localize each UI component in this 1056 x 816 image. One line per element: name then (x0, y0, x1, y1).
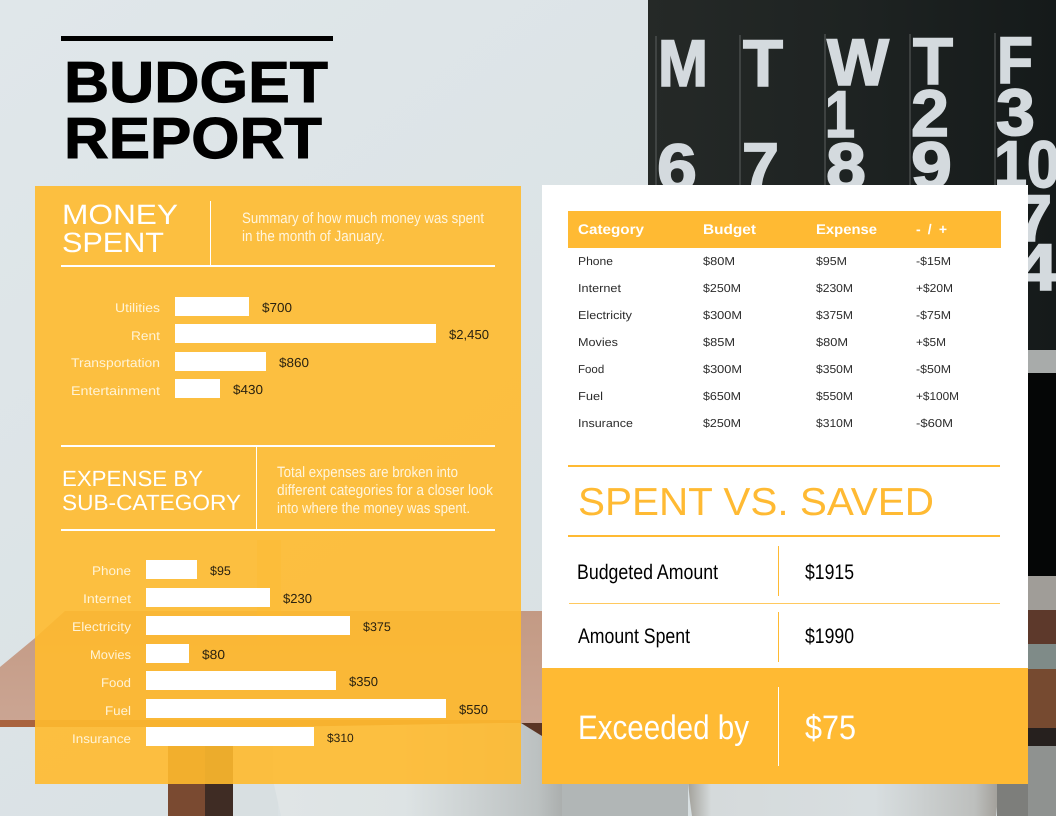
text: sub-category summary: different categories for a closer look (277, 482, 493, 499)
text: sub-category summary (277, 464, 493, 517)
table: budget by category: -$75M (916, 310, 951, 322)
heading: expense by sub-category: SUB-CATEGORY (62, 490, 241, 515)
background photo: wall calendar: T (743, 26, 783, 100)
table: budget by category: $300M (703, 364, 742, 376)
table: budget by category (568, 211, 1001, 430)
bar chart: expense by sub-category: $375 (363, 620, 391, 634)
bar chart: expense by sub-category: Electricity (72, 620, 132, 634)
bar chart: expense by sub-category: Internet (83, 592, 132, 606)
table: budget by category: $375M (816, 310, 853, 322)
background photo: table (0, 540, 700, 816)
row: amount spent: $1990 (805, 625, 854, 648)
table: budget by category: $650M (703, 391, 741, 403)
background photo: wall calendar: T (913, 24, 953, 98)
panel: money spent and expense by sub-category (35, 186, 521, 784)
bar chart: expense by sub-category: $350 (349, 674, 378, 689)
heading: money spent (62, 199, 178, 258)
table: budget by category: -$60M (916, 418, 953, 430)
table: budget by category: $250M (703, 283, 741, 295)
callout: exceeded by: Exceeded by (578, 709, 749, 747)
bar chart: expense by sub-category (72, 560, 488, 746)
table: budget by category: Budget (703, 221, 756, 237)
background photo: wall calendar: 3 (996, 75, 1035, 149)
background photo: wall calendar: 8 (826, 129, 866, 203)
heading: expense by sub-category: EXPENSE BY (62, 466, 203, 491)
text: money spent summary (242, 210, 485, 245)
background photo: bowls and lower wall (233, 610, 1056, 816)
table: budget by category: $80M (703, 256, 735, 268)
bar chart: money spent: Utilities (115, 301, 160, 315)
bar chart: money spent (71, 297, 489, 398)
table: budget by category: Phone (578, 256, 613, 268)
table: budget by category: +$5M (916, 337, 946, 349)
bar chart: expense by sub-category: Phone (92, 564, 131, 578)
background photo: wall calendar: F (997, 23, 1033, 97)
bar chart: money spent: Transportation (71, 356, 160, 370)
row: budgeted amount: Budgeted Amount (577, 561, 718, 584)
table: budget by category: Category (578, 221, 644, 237)
heading: expense by sub-category (62, 466, 241, 515)
bar chart: expense by sub-category: $230 (283, 591, 312, 606)
table: budget by category: Internet (578, 283, 622, 295)
text: sub-category summary: Total expenses are broken into (277, 464, 458, 481)
bar chart: expense by sub-category: Food (101, 676, 131, 690)
row: budgeted amount (577, 546, 854, 596)
text: money spent summary: Summary of how much money was spent (242, 210, 485, 227)
table: budget by category: $230M (816, 283, 853, 295)
background photo: wall calendar: M (658, 26, 708, 100)
table: budget by category: Insurance (578, 418, 633, 430)
background photo: wall calendar: 1 (825, 77, 855, 151)
table: budget by category: $80M (816, 337, 848, 349)
background photo: wall calendar: W (827, 25, 890, 99)
title block: REPORT (64, 106, 322, 171)
background photo: wall calendar: 4 (1016, 230, 1056, 304)
bar chart: expense by sub-category: $95 (210, 564, 231, 578)
table: budget by category: Food (578, 364, 604, 376)
background photo: wall calendar: 7 (1016, 181, 1052, 255)
table: budget by category: Electricity (578, 310, 632, 322)
title block: BUDGET (64, 50, 328, 115)
bar chart: expense by sub-category: Insurance (72, 732, 131, 746)
heading: spent vs saved: SPENT VS. SAVED (578, 481, 934, 524)
bar chart: expense by sub-category: $310 (327, 731, 354, 745)
title block (61, 36, 333, 171)
row: amount spent: Amount Spent (578, 625, 690, 648)
table: budget by category: $350M (816, 364, 853, 376)
table: budget by category: $310M (816, 418, 853, 430)
background photo: wall calendar: 9 (911, 128, 952, 202)
bar chart: money spent: $860 (279, 355, 309, 370)
table: budget by category: Expense (816, 221, 877, 237)
table: budget by category: Movies (578, 337, 618, 349)
panel: budget table and spent vs saved (542, 185, 1028, 668)
table: budget by category: $95M (816, 256, 847, 268)
table: budget by category: $250M (703, 418, 741, 430)
heading: money spent: MONEY (62, 199, 178, 230)
background photo: wall calendar (648, 0, 1056, 610)
table: budget by category: - / + (916, 221, 947, 237)
table: budget by category: +$20M (916, 283, 953, 295)
callout: exceeded by: $75 (805, 709, 856, 747)
bar chart: money spent: Rent (131, 329, 161, 343)
table: budget by category: $550M (816, 391, 853, 403)
bar chart: money spent: $700 (262, 300, 292, 315)
table: budget by category: Fuel (578, 391, 603, 403)
background photo: wall calendar: 2 (911, 76, 949, 150)
bar chart: money spent: Entertainment (71, 384, 161, 398)
background photo: wall calendar: 6 (657, 130, 697, 204)
bar chart: expense by sub-category: Movies (90, 648, 131, 662)
table: budget by category: -$50M (916, 364, 951, 376)
text: sub-category summary: into where the money was spent. (277, 500, 470, 517)
table: budget by category: -$15M (916, 256, 951, 268)
row: amount spent (578, 612, 854, 662)
table: budget by category: $300M (703, 310, 742, 322)
heading: money spent: SPENT (62, 227, 164, 258)
background photo: wall calendar: 7 (742, 129, 779, 203)
row: budgeted amount: $1915 (805, 561, 854, 584)
bar chart: expense by sub-category: $80 (202, 647, 225, 662)
bar chart: expense by sub-category: Fuel (105, 704, 131, 718)
bar chart: expense by sub-category: $550 (459, 702, 488, 717)
bar chart: money spent: $2,450 (449, 327, 489, 342)
table: budget by category: +$100M (916, 391, 959, 403)
callout: exceeded by (542, 668, 1028, 784)
text: money spent summary: in the month of January. (242, 228, 385, 245)
table: budget by category: $85M (703, 337, 735, 349)
bar chart: money spent: $430 (233, 382, 263, 397)
